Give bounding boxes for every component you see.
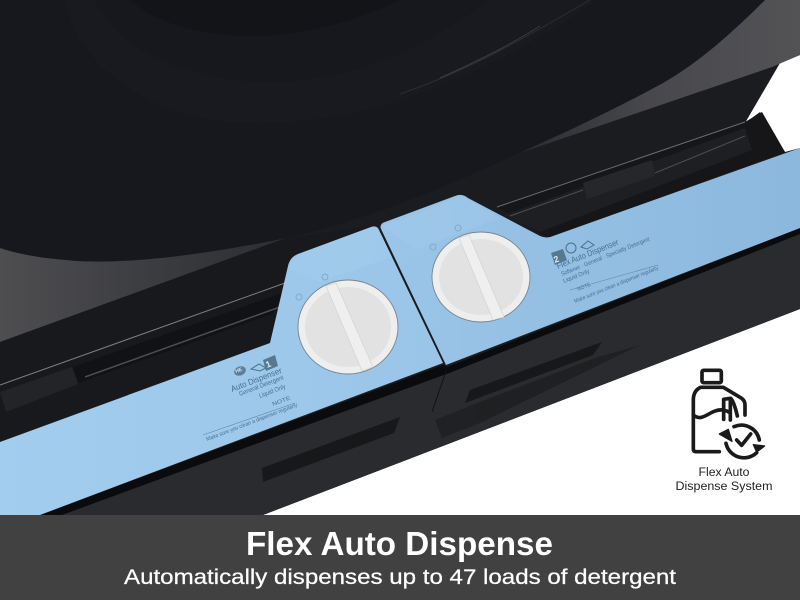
right label: Make sure you clean a dispenser regularly bbox=[574, 265, 659, 305]
icon: detergent bottle with cycle arrows bbox=[693, 370, 765, 458]
right label: Flex Auto Dispenser bbox=[555, 237, 620, 271]
left drawer slot bbox=[262, 417, 400, 482]
icon caption bbox=[676, 467, 772, 493]
right label: NOTE bbox=[577, 282, 592, 293]
rear hinge recess left bbox=[0, 225, 380, 442]
icon: right droplet marks bbox=[430, 225, 461, 250]
left label: Auto Dispenser bbox=[229, 365, 283, 394]
left blue dispenser lid bbox=[0, 226, 443, 515]
right label bbox=[551, 237, 659, 305]
left label: Make sure you clean a dispenser regularly bbox=[206, 402, 298, 443]
icon caption: Dispense System bbox=[676, 481, 772, 493]
right blue dispenser lid bbox=[380, 148, 800, 365]
right label: 2 bbox=[552, 254, 560, 265]
title: Flex Auto Dispense bbox=[246, 525, 553, 562]
icon: left droplet marks bbox=[296, 274, 328, 300]
left label: HE bbox=[235, 367, 244, 375]
left cap bbox=[298, 280, 398, 374]
subtitle: Automatically dispenses up to 47 loads of detergent bbox=[124, 565, 676, 589]
left label: 1 bbox=[264, 359, 272, 370]
icon caption: Flex Auto bbox=[698, 467, 750, 479]
bottom banner bbox=[0, 515, 800, 600]
left label: NOTE bbox=[272, 395, 292, 408]
right cap bbox=[432, 232, 530, 322]
left label: General Detergent bbox=[238, 374, 285, 398]
right drawer slot bbox=[435, 342, 640, 438]
right label: Liquid Only bbox=[563, 269, 591, 285]
left label bbox=[203, 355, 298, 443]
right label: Softener · General · Specialty Detergent bbox=[561, 237, 651, 278]
washer door bbox=[0, 0, 765, 262]
rear hinge recess right bbox=[497, 112, 785, 238]
left label: Liquid Only bbox=[258, 383, 287, 400]
front drawer bbox=[40, 228, 800, 515]
